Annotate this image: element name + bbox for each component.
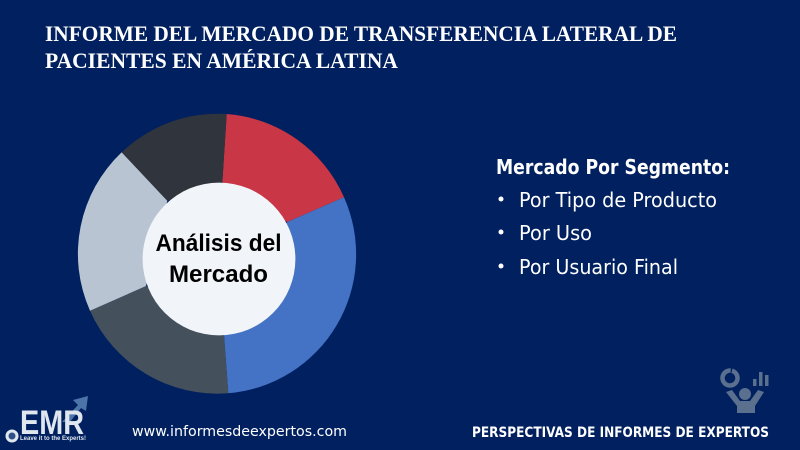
segment: light grey <box>78 152 167 311</box>
website url: www.informesdeexpertos.com <box>132 424 347 440</box>
center label <box>156 230 282 288</box>
title <box>45 21 677 73</box>
donut chart <box>78 114 356 394</box>
icon: analyst with charts <box>721 369 768 413</box>
center label: Análisis del <box>156 230 282 257</box>
segment list <box>496 155 730 279</box>
logo: EMR <box>7 396 88 442</box>
segment: slate <box>90 286 228 394</box>
title: PACIENTES EN AMÉRICA LATINA <box>45 48 398 73</box>
list heading: Mercado Por Segmento: <box>496 155 730 179</box>
center label: Mercado <box>169 261 268 288</box>
segment: charcoal <box>122 114 227 201</box>
logo tagline: Leave it to the Experts! <box>20 435 86 442</box>
segment: red <box>222 114 344 222</box>
donut center <box>143 183 295 335</box>
logo letters: EMR <box>20 404 84 442</box>
segment: blue <box>224 197 356 393</box>
list item: Por Uso <box>519 221 592 245</box>
title: INFORME DEL MERCADO DE TRANSFERENCIA LATERAL DE <box>45 21 677 46</box>
list item: Por Usuario Final <box>519 255 678 279</box>
list item: Por Tipo de Producto <box>519 188 717 212</box>
logo arrow <box>62 396 88 422</box>
logo ring <box>7 431 17 441</box>
